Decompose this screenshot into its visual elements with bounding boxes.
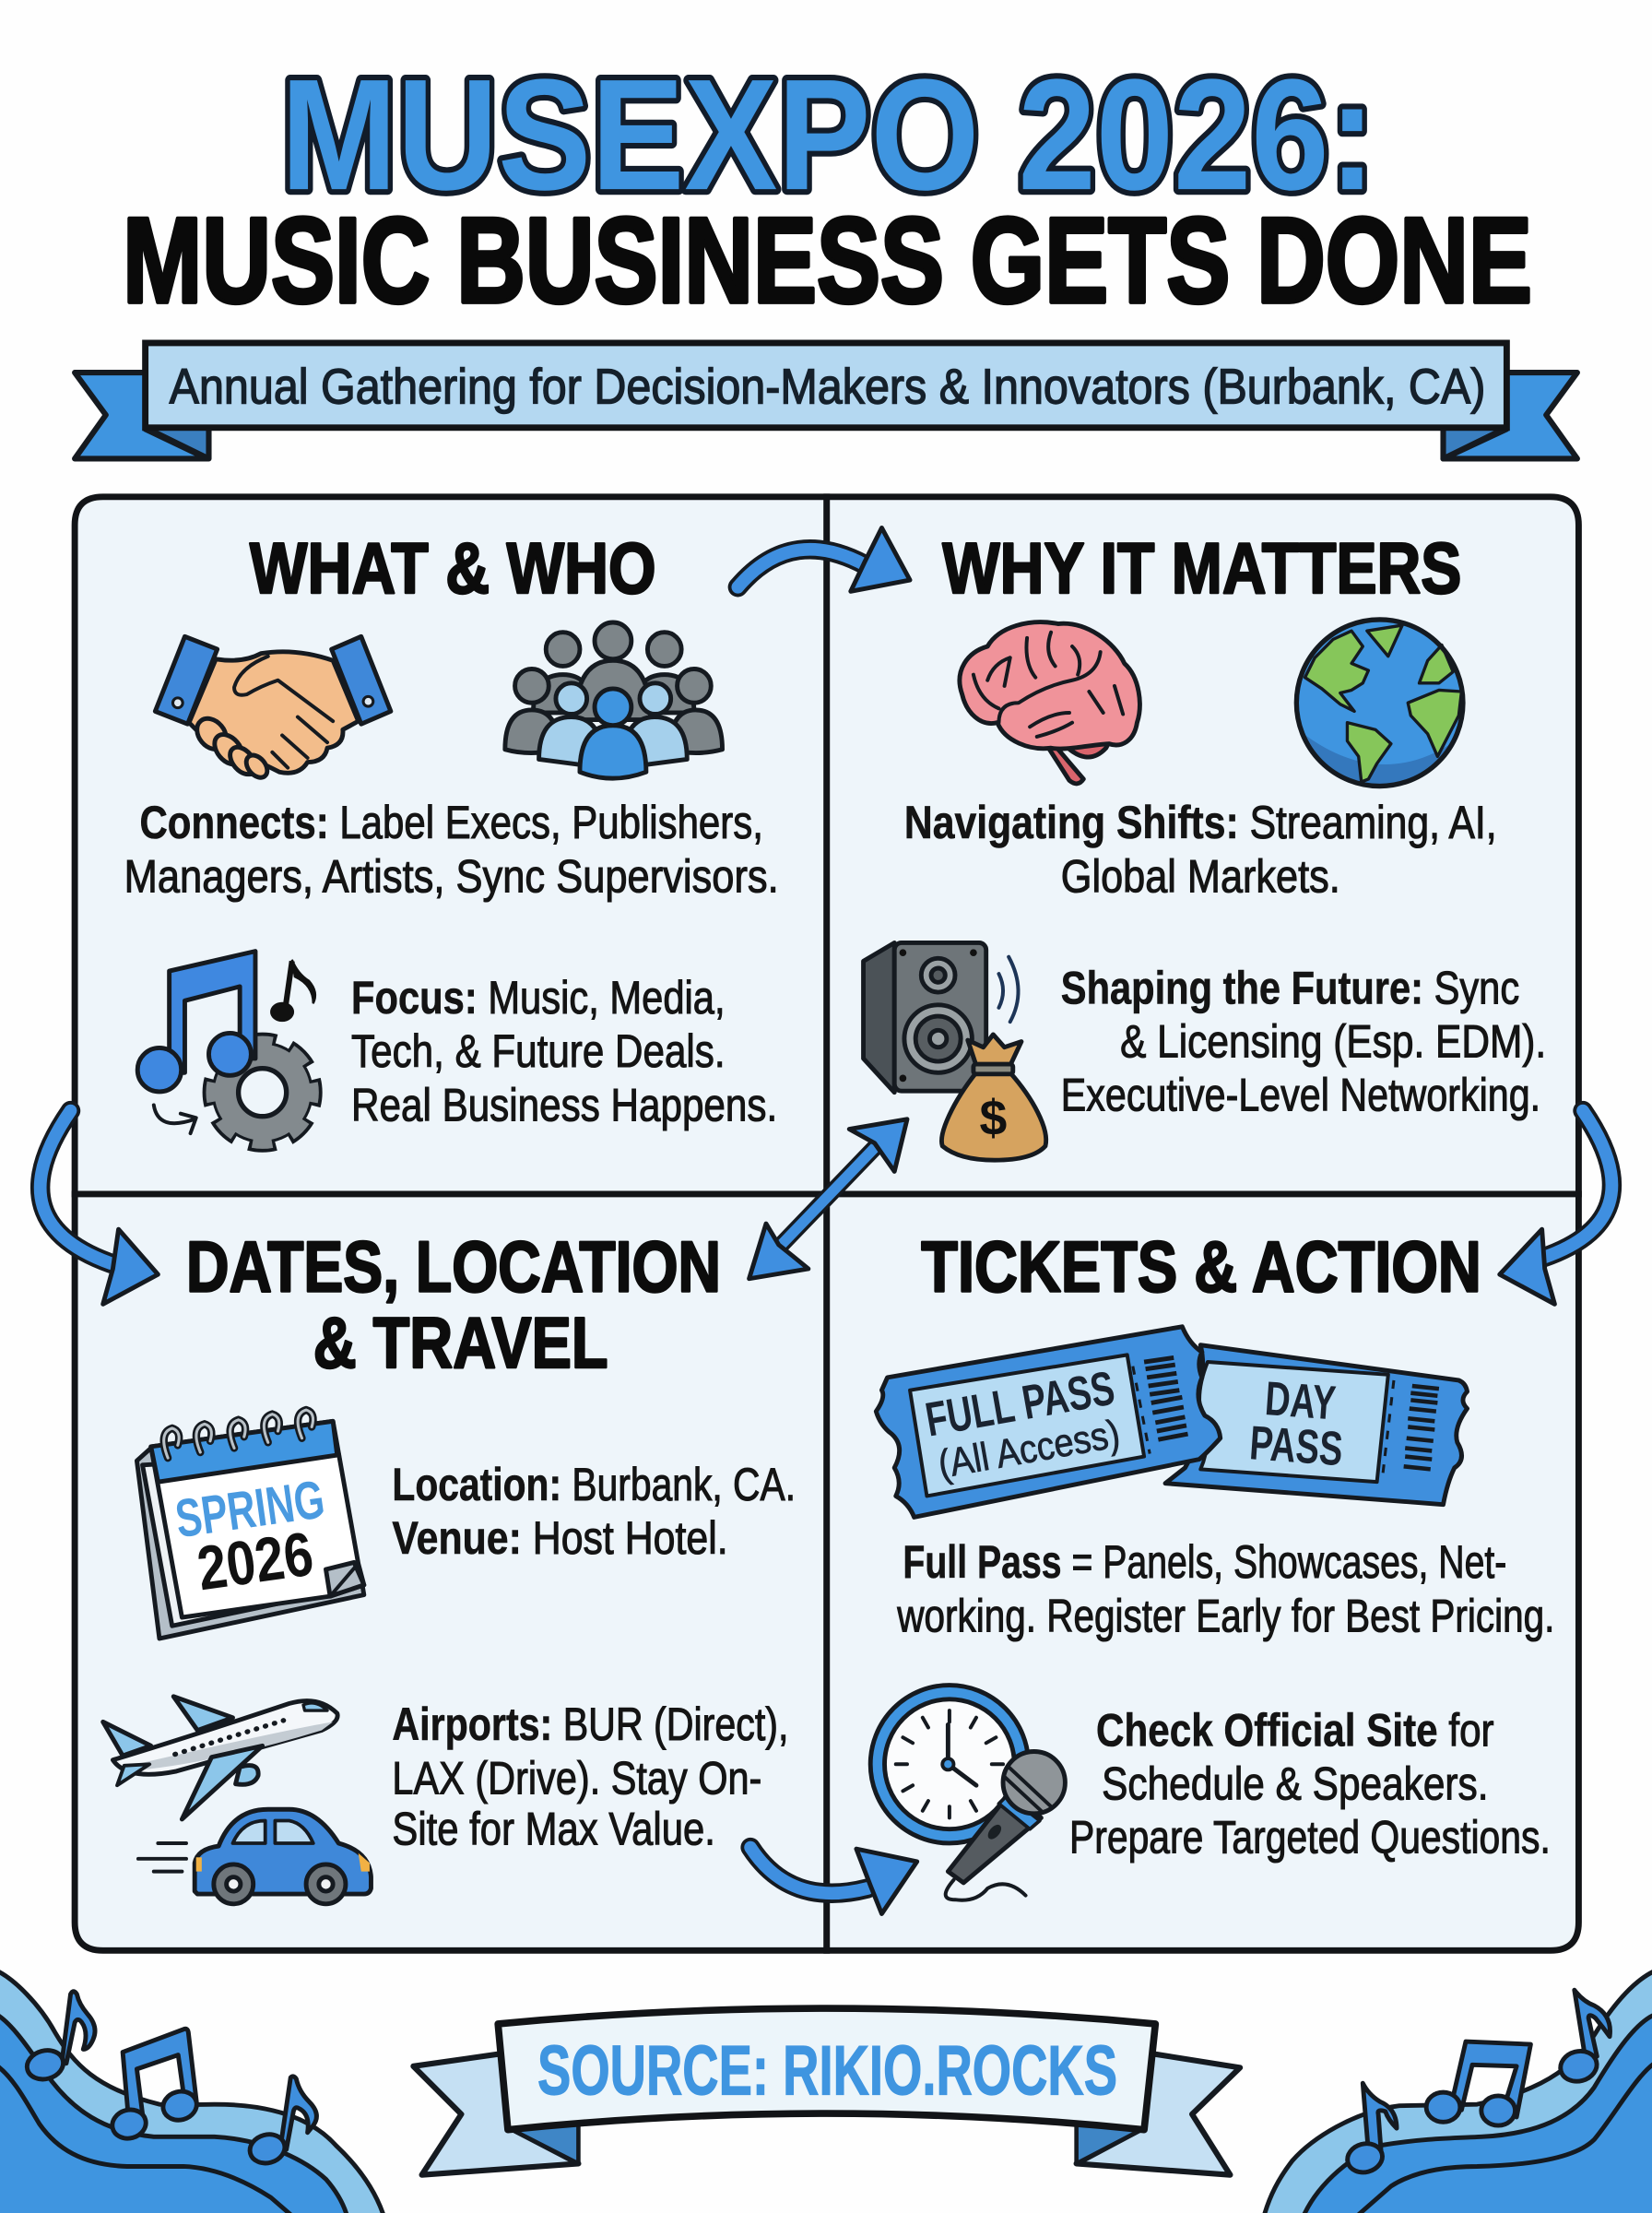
- panel: why it matters: [827, 497, 1578, 1194]
- heading: tickets and action: TICKETS & ACTION: [921, 1226, 1481, 1308]
- source text: SOURCE: RIKIO.ROCKS: [537, 2031, 1117, 2110]
- arrow: double diagonal: [749, 1119, 907, 1279]
- icon: speaker: [864, 942, 1019, 1093]
- panel: what and who: [75, 497, 827, 1194]
- icon: full pass ticket: [876, 1327, 1221, 1517]
- text: airports: Airports: BUR (Direct),: [392, 1698, 788, 1750]
- source ribbon: [413, 2008, 1240, 2175]
- heading: what and who: WHAT & WHO: [250, 527, 656, 609]
- icon: airplane: [103, 1697, 337, 1819]
- arrow: dates to tickets: [750, 1848, 917, 1914]
- icon: calendar: SPRING: [171, 1469, 328, 1549]
- icon: money bag: [941, 1035, 1046, 1160]
- icon: full pass ticket: (All Access): [935, 1412, 1123, 1487]
- text: shaping line three: Executive-Level Networking.: [1061, 1069, 1540, 1121]
- subtitle ribbon: [75, 343, 1577, 458]
- icon: full pass ticket: FULL PASS: [922, 1362, 1118, 1448]
- icon: calendar: [136, 1410, 364, 1639]
- heading: why it matters: WHY IT MATTERS: [942, 527, 1461, 609]
- text: shaping the future: Shaping the Future: Sync: [1061, 961, 1519, 1013]
- text: connects: Connects: Label Execs, Publishers,: [140, 796, 763, 848]
- text: check line three: Prepare Targeted Questions.: [1069, 1811, 1551, 1864]
- footer wave: right: [1264, 1970, 1652, 2213]
- text: full pass: Full Pass = Panels, Showcases, Net-: [903, 1535, 1506, 1588]
- heading: dates location: DATES, LOCATION: [186, 1226, 721, 1308]
- icon: money bag: $: [979, 1092, 1007, 1146]
- footer note: right beamed: [1426, 2041, 1530, 2125]
- footer note: left beamed: [109, 2029, 200, 2142]
- heading: and travel: & TRAVEL: [313, 1302, 608, 1383]
- icon: music note and gear: [137, 952, 315, 1144]
- icon: day pass ticket: [1165, 1345, 1468, 1505]
- text: airports line two: LAX (Drive). Stay On-: [392, 1751, 761, 1804]
- icon: brain: [960, 622, 1139, 784]
- text: focus line three: Real Business Happens.: [351, 1078, 777, 1130]
- text: check official site: Check Official Site for: [1096, 1703, 1494, 1756]
- text: airports line three: Site for Max Value.: [392, 1803, 715, 1855]
- title: MUSEXPO 2026: MUSEXPO 2026:: [281, 47, 1375, 223]
- text: focus: Focus: Music, Media,: [351, 971, 726, 1024]
- icon: microphone: [946, 1751, 1065, 1900]
- icon: day pass ticket: PASS: [1248, 1416, 1344, 1476]
- icon: day pass ticket: DAY: [1263, 1372, 1338, 1430]
- icon: clock: [870, 1686, 1029, 1843]
- text: connects line two: Managers, Artists, Sync Supervisors.: [124, 849, 779, 902]
- icon: handshake: [155, 636, 391, 782]
- arrow: what to dates: [41, 1111, 158, 1304]
- text: location: Location: Burbank, CA.: [392, 1458, 796, 1510]
- footer note: left second single: [247, 2077, 316, 2167]
- text: navigating shifts line two: Global Markets.: [1061, 849, 1340, 902]
- footer note: right low single: [1344, 2083, 1397, 2176]
- panel: tickets and action: [827, 1194, 1578, 1950]
- subtitle text: Annual Gathering for Decision-Makers & Innovators (Burbank, CA): [170, 361, 1485, 415]
- text: venue: Venue: Host Hotel.: [392, 1511, 728, 1564]
- text: check line two: Schedule & Speakers.: [1102, 1757, 1488, 1810]
- footer wave: left: [0, 1970, 384, 2213]
- icon: calendar: 2026: [194, 1520, 317, 1604]
- text: focus line two: Tech, & Future Deals.: [351, 1024, 726, 1077]
- arrow: what to why: [738, 527, 910, 591]
- text: navigating shifts: Navigating Shifts: Streaming, AI,: [904, 796, 1497, 848]
- icon: globe: [1296, 620, 1463, 787]
- text: shaping line two: & Licensing (Esp. EDM).: [1120, 1014, 1546, 1067]
- panel: dates location and travel: [75, 1194, 827, 1950]
- arrow: why to tickets: [1500, 1111, 1611, 1304]
- icon: audience group: [505, 622, 723, 778]
- footer note: right top single: [1557, 1990, 1610, 2085]
- footer note: left single: [24, 1992, 95, 2083]
- icon: car: [138, 1809, 371, 1904]
